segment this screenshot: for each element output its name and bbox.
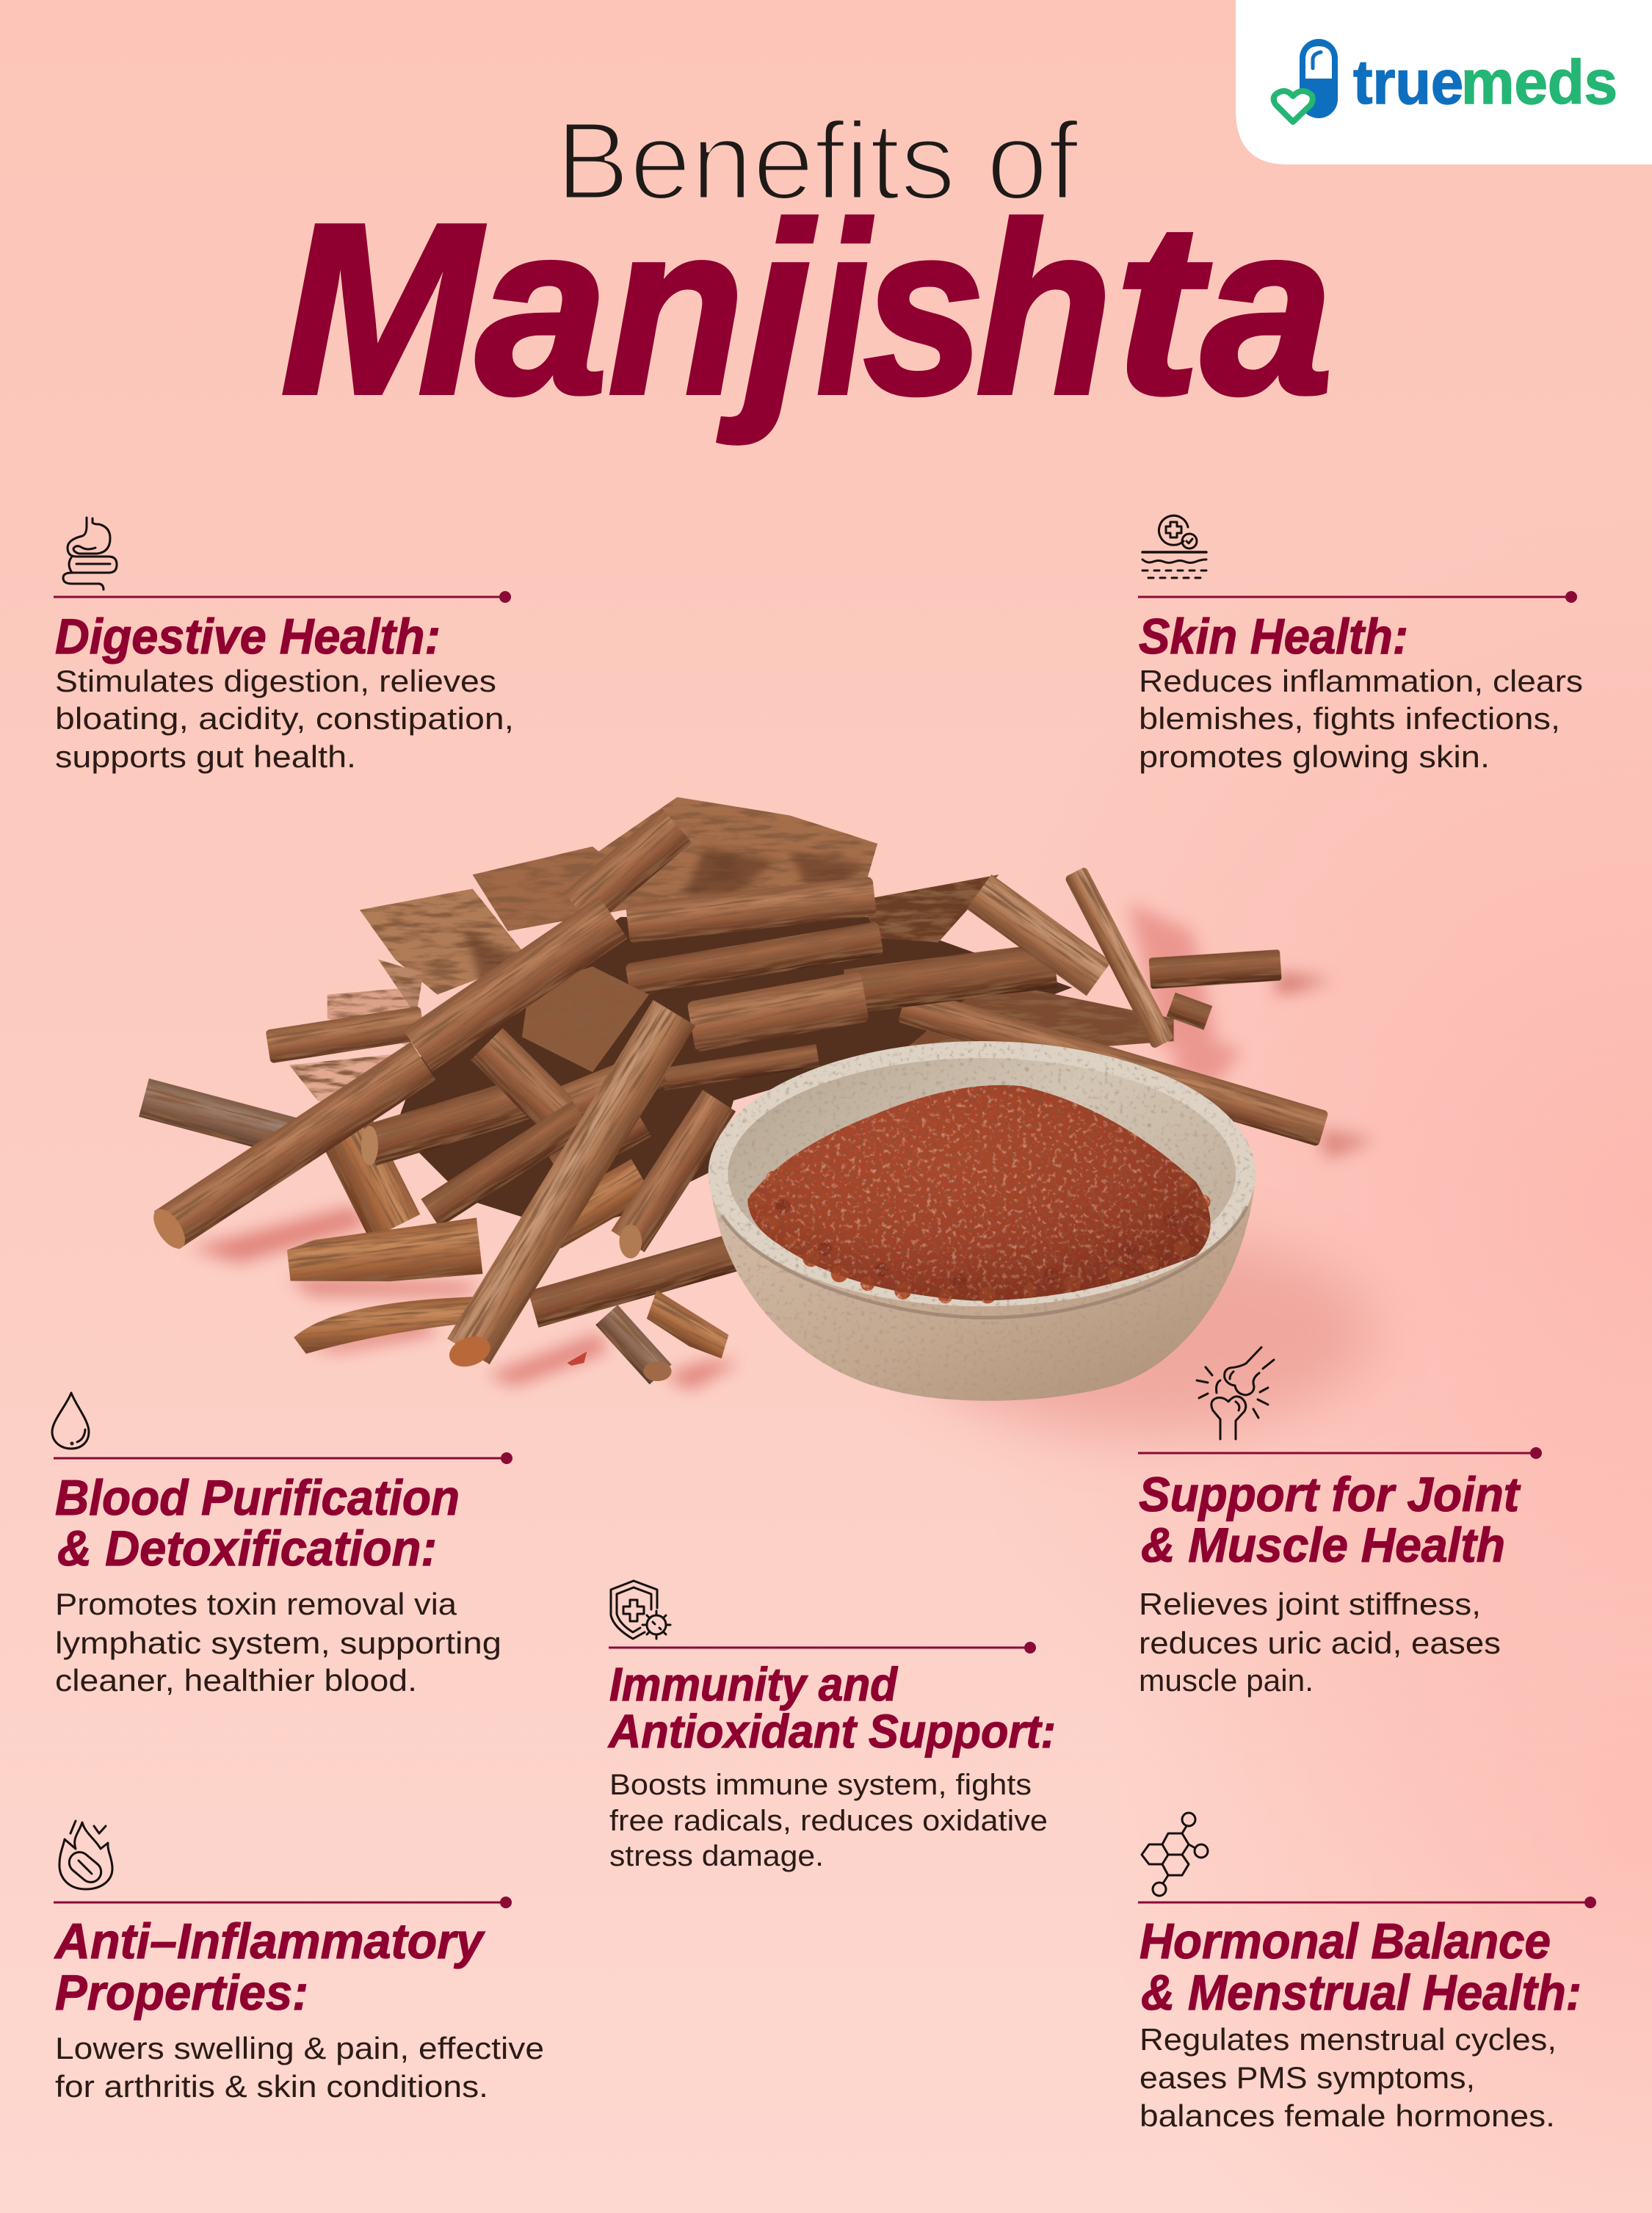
body text: Regulates menstrual cycles, — [1140, 2022, 1557, 2057]
title: Benefits of: Benefits of — [556, 98, 1079, 222]
heading: Blood Purification — [55, 1470, 460, 1526]
body text: supports gut health. — [55, 739, 356, 774]
icon: stomach and intestines — [63, 518, 117, 590]
logo wordmark: meds — [1461, 48, 1617, 117]
bowl inner wall — [728, 1058, 1236, 1289]
heading — [607, 1658, 1056, 1758]
divider — [54, 1452, 512, 1464]
panel: hormonal balance — [1138, 1813, 1596, 2133]
icon: shield with virus — [611, 1581, 670, 1639]
heading — [55, 1470, 460, 1576]
heading: Support for Joint — [1139, 1467, 1521, 1521]
photo: manjishta roots and powder bowl — [139, 797, 1375, 1432]
title: Manjishta: n — [608, 173, 745, 445]
body text — [55, 664, 514, 774]
body text: balances female hormones. — [1140, 2098, 1555, 2133]
body text: for arthritis & skin conditions. — [55, 2069, 488, 2104]
body text: Relieves joint stiffness, — [1139, 1587, 1481, 1621]
rim shadow line — [722, 1206, 1247, 1318]
body text: blemishes, fights infections, — [1139, 701, 1560, 736]
icon: drop — [52, 1393, 89, 1449]
body text: cleaner, healthier blood. — [55, 1663, 417, 1698]
bowl shadow — [910, 1234, 1375, 1432]
body text — [1139, 664, 1583, 774]
panel: blood purification — [52, 1393, 512, 1698]
title: Manjishta: a — [476, 173, 608, 445]
bowl rim — [709, 1041, 1256, 1306]
divider — [609, 1642, 1036, 1654]
body text: reduces uric acid, eases — [1139, 1626, 1501, 1660]
body text: Stimulates digestion, relieves — [55, 664, 496, 698]
divider — [1138, 1897, 1596, 1908]
creases on back pieces — [465, 847, 861, 980]
icon: capsule with heart — [1274, 39, 1338, 122]
body text: free radicals, reduces oxidative — [609, 1805, 1048, 1837]
icon: molecule — [1142, 1813, 1208, 1896]
dark gaps — [395, 917, 1072, 1230]
logo wordmark: true — [1353, 48, 1463, 117]
body text — [609, 1769, 1048, 1872]
heading: Skin Health: — [1139, 609, 1408, 664]
body text: muscle pain. — [1139, 1663, 1314, 1698]
panel: joint and muscle health — [1138, 1347, 1542, 1698]
heading: & Detoxification: — [57, 1521, 437, 1576]
body text: stress damage. — [609, 1840, 824, 1872]
body text — [1139, 1587, 1501, 1698]
body text: Promotes toxin removal via — [55, 1587, 457, 1621]
divider — [1138, 591, 1577, 603]
cut ends — [148, 1203, 192, 1254]
back flat pieces — [289, 797, 877, 1107]
divider — [54, 1897, 512, 1908]
panel: anti-inflammatory properties — [54, 1821, 544, 2104]
title: Manjishta: a — [1201, 173, 1333, 445]
divider — [54, 591, 511, 603]
heading: & Muscle Health — [1141, 1518, 1505, 1572]
logo card — [1236, 0, 1652, 164]
body text: Lowers swelling & pain, effective — [55, 2031, 544, 2065]
body text: promotes glowing skin. — [1139, 739, 1490, 774]
heading — [54, 1913, 485, 2021]
icon: flame with pill — [59, 1821, 112, 1889]
divider — [1138, 1447, 1542, 1459]
heading: Properties: — [55, 1965, 308, 2021]
body text: eases PMS symptoms, — [1140, 2060, 1475, 2095]
bowl — [709, 1041, 1256, 1401]
heading: Antioxidant Support: — [607, 1705, 1056, 1758]
title: Manjishta: M — [280, 173, 487, 445]
title: Manjishta: j — [718, 173, 816, 446]
body text — [1140, 2022, 1557, 2133]
body text: bloating, acidity, constipation, — [55, 701, 514, 736]
heading: & Menstrual Health: — [1141, 1965, 1582, 2021]
title: Manjishta: h — [976, 173, 1112, 445]
body text — [55, 2031, 544, 2104]
title: Manjishta: t — [1115, 173, 1212, 445]
body text: Reduces inflammation, clears — [1139, 664, 1583, 698]
heading — [1140, 1913, 1582, 2021]
cast shadows — [190, 903, 1375, 1390]
heading: Digestive Health: — [55, 609, 441, 664]
red crumb — [567, 1352, 587, 1366]
wood sticks and pieces — [139, 797, 1329, 1385]
panel: digestive health — [54, 518, 514, 774]
panel: immunity and antioxidant support — [607, 1581, 1056, 1872]
icon: skin layers with medical cross — [1142, 515, 1206, 578]
heading: Anti–Inflammatory — [54, 1913, 485, 1969]
title: Manjishta — [280, 173, 1333, 446]
heading: Immunity and — [609, 1658, 899, 1711]
bowl body — [709, 1174, 1256, 1401]
body text: lymphatic system, supporting — [55, 1626, 501, 1660]
title: Manjishta: i — [816, 173, 873, 445]
title: Manjishta: s — [863, 173, 985, 445]
heading — [1139, 1467, 1521, 1572]
icon: joint bones — [1197, 1347, 1274, 1439]
body text — [55, 1587, 501, 1698]
heading: Hormonal Balance — [1140, 1913, 1551, 1969]
powder — [747, 1085, 1211, 1303]
panel: skin health — [1138, 515, 1583, 774]
body text: Boosts immune system, fights — [609, 1769, 1032, 1801]
